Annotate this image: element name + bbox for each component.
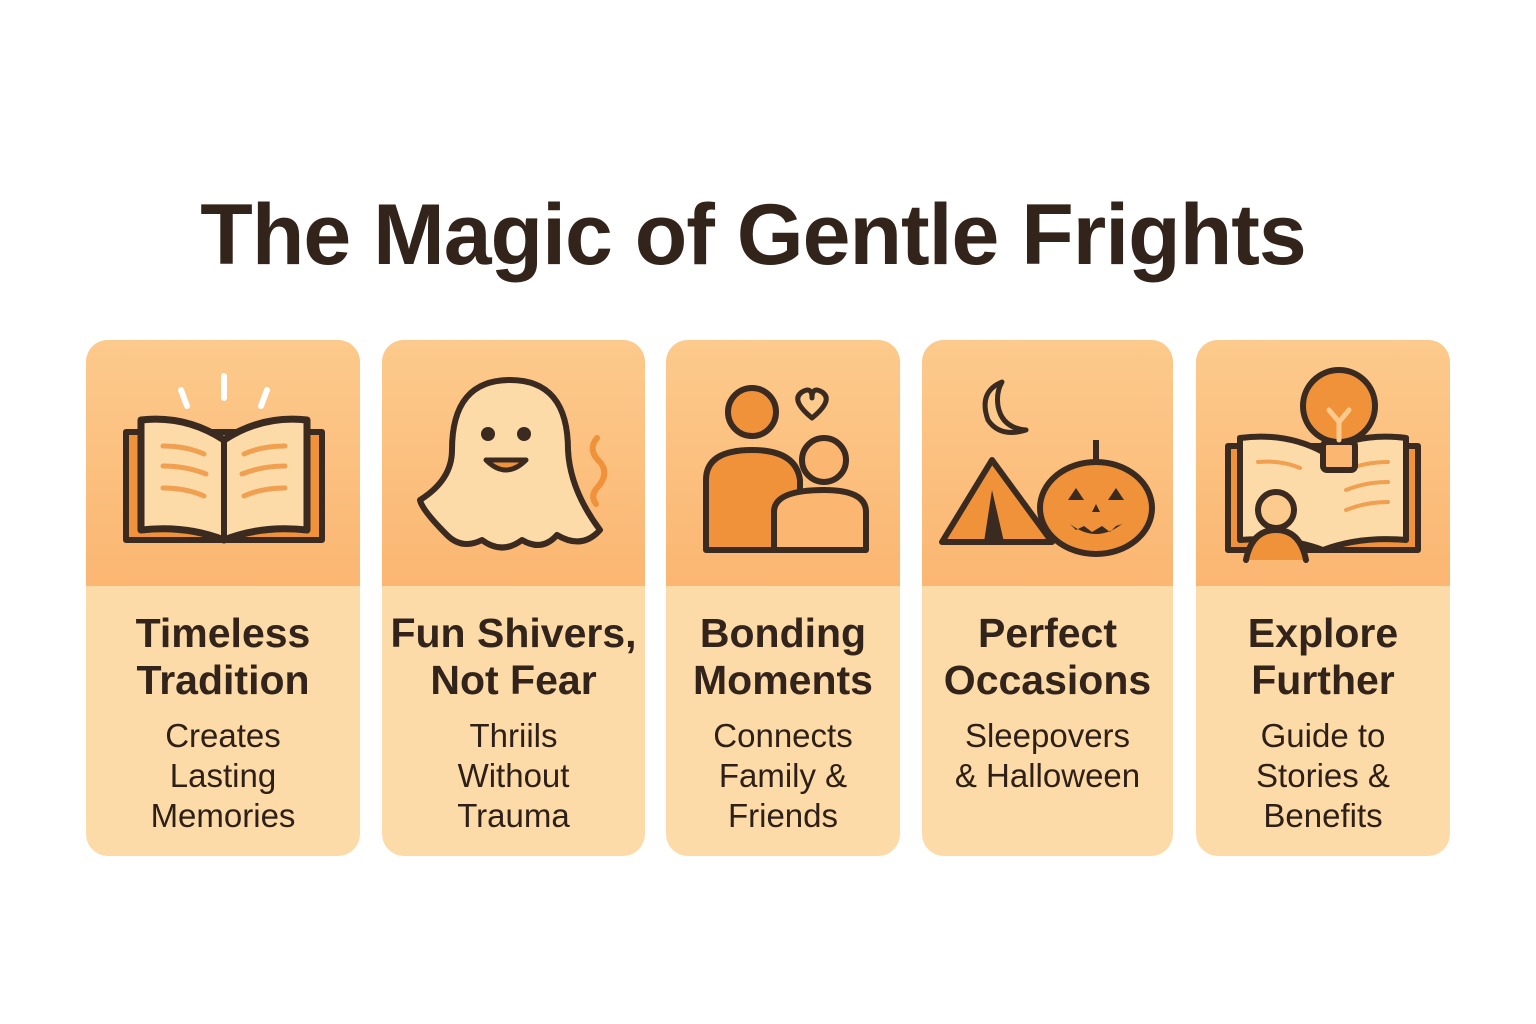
text: Guide to (1261, 717, 1385, 754)
text: Lasting (170, 757, 276, 794)
text: Creates (165, 717, 281, 754)
icon: open book (86, 340, 360, 586)
text: Bonding (700, 610, 866, 656)
icon: book with lightbulb (1196, 340, 1450, 586)
panel: explore further (1196, 340, 1450, 856)
text (693, 610, 873, 834)
text: Further (1251, 657, 1395, 703)
text: Trauma (457, 797, 570, 834)
text: Friends (728, 797, 838, 834)
text (944, 610, 1151, 794)
panel: fun shivers (382, 340, 645, 856)
text: Thriils (470, 717, 558, 754)
text: Family & (719, 757, 847, 794)
title: The Magic of Gentle Frights (200, 187, 1306, 283)
text: Memories (151, 797, 295, 834)
text (136, 610, 310, 834)
text (1248, 610, 1398, 834)
text: Timeless (136, 610, 310, 656)
text: Stories & (1256, 757, 1390, 794)
icon: tent, moon, pumpkin (922, 340, 1173, 586)
panel: perfect occasions (922, 340, 1173, 856)
text: Sleepovers (965, 717, 1130, 754)
text: Benefits (1263, 797, 1383, 834)
icon: ghost (382, 340, 645, 586)
text: Tradition (136, 657, 310, 703)
text: Perfect (978, 610, 1117, 656)
text: Without (458, 757, 569, 794)
text (390, 610, 637, 834)
text: & Halloween (955, 757, 1140, 794)
icon: family (666, 340, 900, 586)
text: Fun Shivers, (390, 610, 637, 656)
text: Occasions (944, 657, 1151, 703)
text: Not Fear (430, 657, 597, 703)
panel: bonding moments (666, 340, 900, 856)
panel: timeless tradition (86, 340, 360, 856)
text: Moments (693, 657, 873, 703)
text: Connects (713, 717, 853, 754)
text: Explore (1248, 610, 1398, 656)
